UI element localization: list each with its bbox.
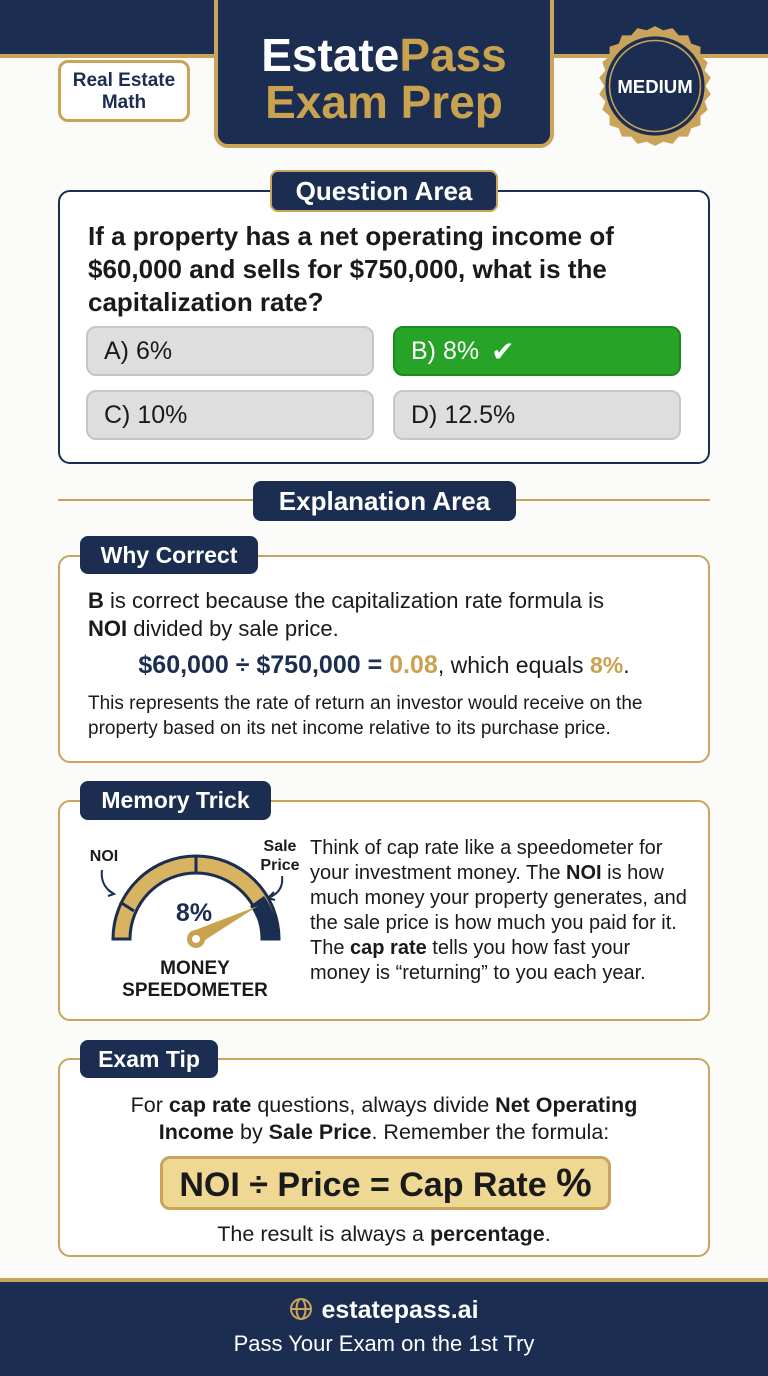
badge: Real Estate Math (58, 60, 190, 122)
option D: D) 12.5% (411, 400, 515, 428)
speedometer icon: SPEEDOMETER (122, 980, 268, 1001)
option B correct: ✔ (491, 336, 515, 366)
tagline: Pass Your Exam on the 1st Try (234, 1331, 534, 1356)
formula: $60,000 ÷ $750,000 = 0.08, which equals 8%. (138, 651, 630, 679)
formula box: NOI ÷ Price = Cap Rate % (179, 1161, 592, 1205)
option B correct (393, 326, 681, 376)
heading: Explanation Area (253, 481, 516, 521)
option A: A) 6% (104, 336, 172, 364)
question text: If a property has a net operating income of $60,000 and sells for $750,000, what is the capitalization rate? (88, 221, 614, 317)
option D (393, 390, 681, 440)
explanation text: B is correct because the capitalization rate formula is NOI divided by sale price. (88, 588, 604, 641)
memory text: Think of cap rate like a speedometer for your investment money. The NOI is how much money your property generates, and the sale price is how much you paid for it. (310, 837, 687, 934)
title panel (214, 0, 554, 148)
heading: Why Correct (80, 536, 258, 574)
description: This represents the rate of return an investor would receive on the property based on its net income relative to its purchase price. (88, 693, 642, 739)
panel: question (58, 190, 710, 464)
speedometer icon: MONEY (160, 958, 230, 979)
medal: MEDIUM (599, 26, 711, 146)
panel: memory trick (58, 800, 710, 1021)
option C (86, 390, 374, 440)
title panel: Exam Prep (265, 76, 503, 128)
option B correct: B) 8% (411, 336, 479, 364)
memory text: The cap rate tells you how fast your money is “returning” to you each year. (310, 937, 646, 984)
tip text: Income by Sale Price. Remember the formula: (159, 1120, 609, 1144)
divider line (58, 499, 710, 501)
panel: why correct (58, 555, 710, 763)
panel: exam tip (58, 1058, 710, 1257)
speedometer icon: Sale (264, 838, 297, 855)
speedometer icon: 8% (176, 899, 212, 927)
heading: Exam Tip (80, 1040, 218, 1078)
heading: Memory Trick (80, 781, 271, 820)
speedometer icon: NOI (90, 848, 118, 865)
heading: Question Area (270, 170, 498, 212)
footer brand: estatepass.ai (321, 1296, 479, 1324)
footer (0, 1278, 768, 1376)
badge: Real Estate Math: Math (102, 92, 146, 113)
tip text: For cap rate questions, always divide Net Operating (131, 1093, 637, 1117)
badge: Real Estate Math: Real Estate (73, 70, 175, 91)
heading: Why Correct: Why Correct (101, 542, 237, 568)
header band (0, 0, 768, 58)
heading: Exam Tip: Exam Tip (98, 1046, 200, 1072)
speedometer icon: Price (260, 857, 300, 874)
medal: MEDIUM: MEDIUM (617, 76, 693, 97)
result note: The result is always a percentage. (217, 1222, 551, 1246)
heading: Memory Trick: Memory Trick (101, 787, 250, 813)
title panel: EstatePass (261, 29, 507, 81)
heading: Question Area: Question Area (296, 176, 472, 206)
heading: Explanation Area: Explanation Area (279, 486, 490, 516)
option A (86, 326, 374, 376)
tip text (131, 1093, 637, 1144)
speedometer icon (90, 838, 300, 1001)
memory text (310, 837, 687, 984)
option C: C) 10% (104, 400, 187, 428)
